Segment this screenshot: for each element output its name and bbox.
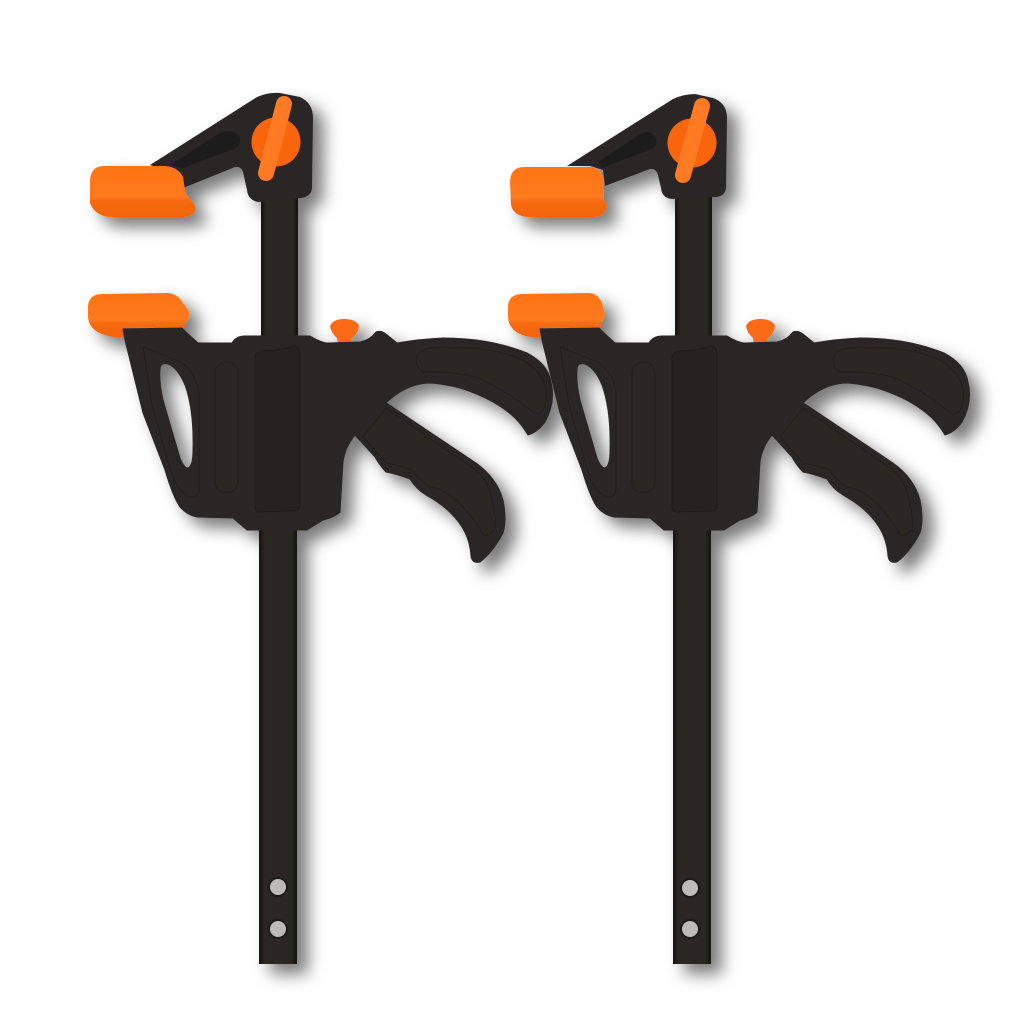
orange lower jaw pad [508,293,605,338]
bar: left clamp rail [259,195,298,964]
bar: right clamp rail [673,195,712,964]
clamp body [540,328,970,530]
trigger inset [780,408,913,535]
orange release button [746,319,775,345]
orange knob [668,106,716,175]
handle trigger [355,402,505,562]
handle recess [416,348,546,414]
orange knob [252,104,300,173]
clamp: left [88,93,553,964]
hole: upper rail hole [269,878,287,896]
orange upper jaw pad [510,167,607,217]
raised centre block [255,346,300,512]
side window rim [560,347,616,497]
fixed jaw head [510,94,727,217]
handle trigger [772,402,922,562]
hole: upper rail hole [681,879,699,897]
handle recess [833,348,963,414]
trigger inset [363,408,496,535]
recessed groove [215,362,238,493]
raised centre block [672,346,717,512]
fixed jaw head [90,93,313,217]
orange lower jaw pad [88,293,189,338]
side window rim [143,347,199,497]
hole: lower rail hole [269,920,287,938]
clamp: right [508,94,970,964]
orange release button [330,319,359,345]
clamp body [123,328,553,530]
hole: lower rail hole [681,920,699,938]
orange upper jaw pad [90,166,196,217]
recessed groove [632,362,655,493]
